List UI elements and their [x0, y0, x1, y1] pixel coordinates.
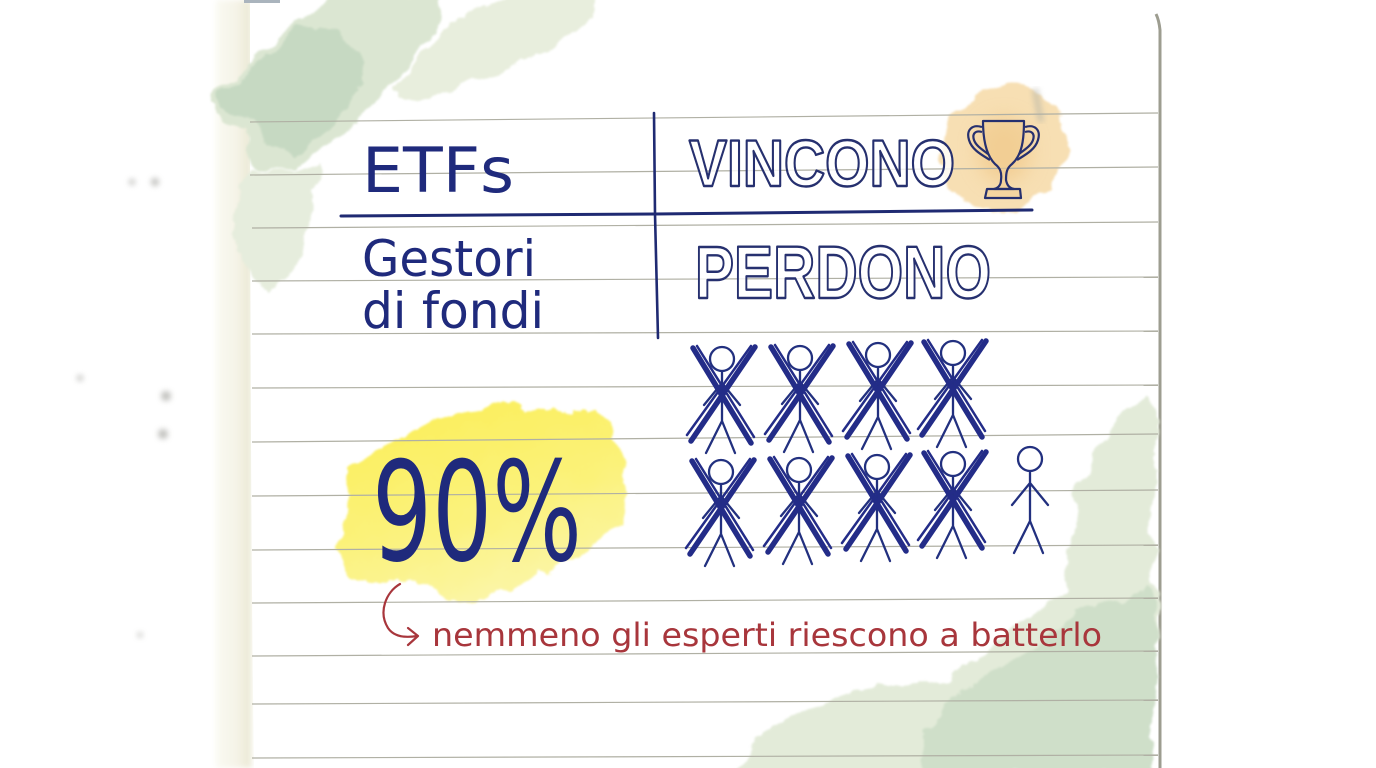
- notebook page: [250, 0, 1158, 768]
- binding clip at top: [244, 0, 280, 3]
- watercolor: orange blob behind trophy: [940, 84, 1070, 212]
- smudge above trophy: [1032, 88, 1044, 122]
- table dividers: [341, 113, 1032, 338]
- paper speckles: [77, 178, 171, 638]
- remaining figure not crossed out: [1012, 447, 1048, 553]
- watercolor: top left green wash: [215, 0, 596, 294]
- watercolor: yellow highlight behind 90%: [334, 402, 625, 610]
- label: second line: di fondi: [362, 282, 544, 340]
- heading: ETFs: ETFs: [362, 134, 514, 207]
- heading: VINCONO: VINCONO: [689, 126, 955, 200]
- watercolor: bottom right green wash: [734, 396, 1155, 768]
- ruled lines: [250, 113, 1158, 758]
- row 2 figures: [686, 451, 986, 566]
- notebook spine: [216, 0, 251, 768]
- icon: trophy: [968, 121, 1039, 198]
- big number: 90%: 90%: [372, 432, 582, 593]
- row 1 figures: [687, 340, 986, 453]
- heading: PERDONO: PERDONO: [695, 231, 991, 314]
- label: Gestori di fondi: Gestori: [362, 230, 536, 288]
- pictogram: nine stick figures, eight crossed out: [686, 340, 1048, 566]
- page edge: [1156, 14, 1160, 768]
- arrow: [384, 584, 418, 645]
- caption: nemmeno gli esperti riescono a batterlo: [432, 616, 1102, 654]
